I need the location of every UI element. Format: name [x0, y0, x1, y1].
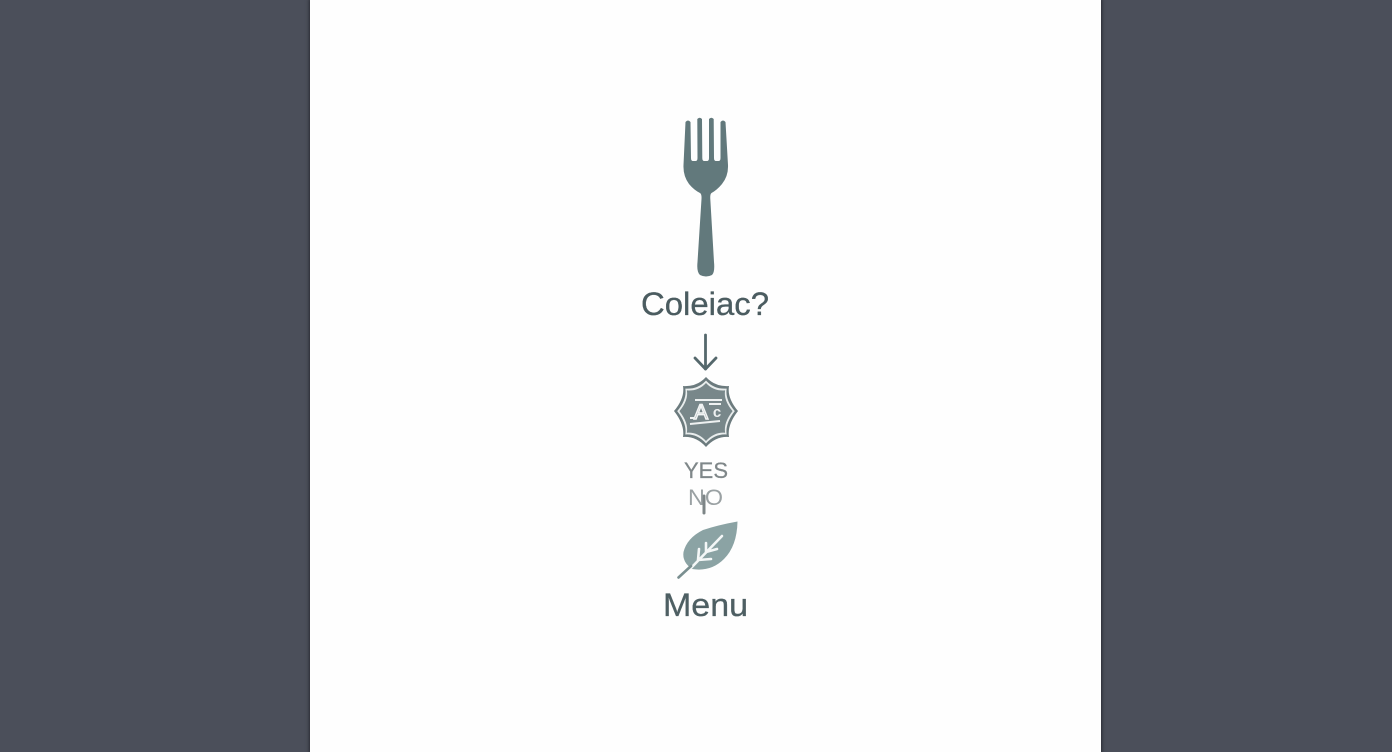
label: NO: NO	[688, 485, 723, 510]
arrow: down	[695, 335, 716, 369]
white page panel	[310, 0, 1101, 752]
icon: fork	[683, 118, 728, 276]
icon: leaf	[678, 522, 738, 578]
icon: allergen badge: c	[713, 404, 721, 421]
label: Menu: Menu	[663, 587, 748, 623]
badge letters: A	[694, 401, 708, 424]
right background band	[1101, 0, 1392, 752]
label: YES: YES	[684, 458, 728, 483]
left background band	[0, 0, 310, 752]
heading: Coleiac?: Coleiac?	[641, 286, 769, 322]
icon: allergen badge	[674, 377, 738, 447]
